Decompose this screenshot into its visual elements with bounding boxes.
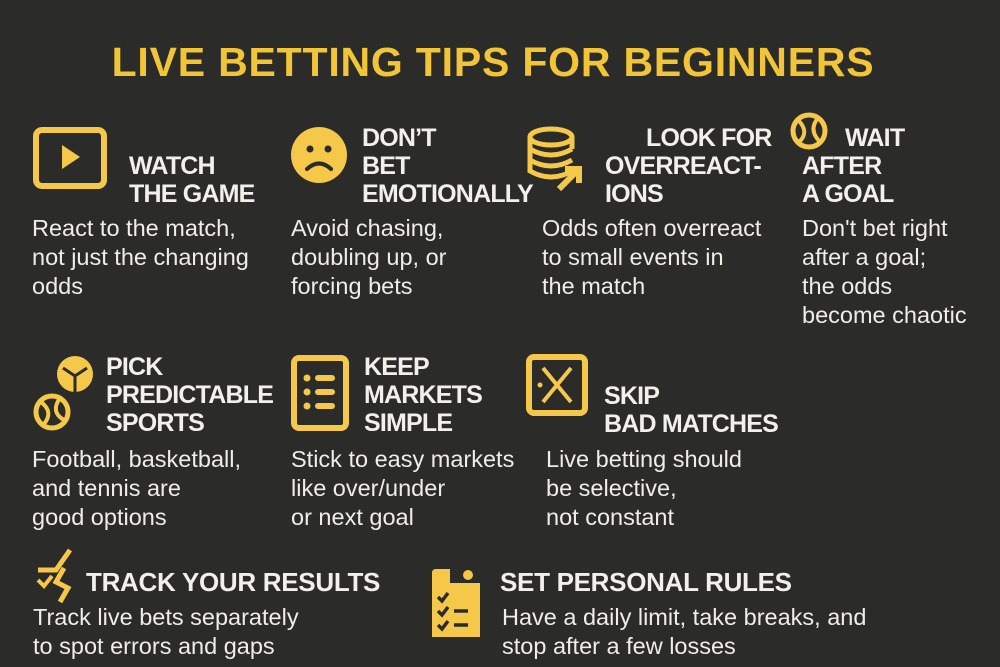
text (32, 215, 249, 299)
text: and tennis are (32, 475, 181, 501)
heading: MARKETS (364, 381, 482, 409)
text (542, 215, 762, 299)
text: not just the changing (32, 244, 249, 270)
tip: look for overreactions (528, 124, 772, 299)
text: good options (32, 504, 167, 530)
text: Odds often overreact (542, 215, 761, 241)
heading (364, 353, 482, 437)
heading: EMOTIONALLY (362, 180, 533, 208)
text (291, 446, 514, 530)
heading: WATCH (129, 152, 215, 180)
tip: keep markets simple (291, 353, 514, 530)
text: Stick to easy markets (291, 446, 514, 472)
heading: BET (362, 152, 410, 180)
heading (106, 353, 273, 437)
text: to spot errors and gaps (33, 633, 275, 659)
heading: IONS (605, 180, 663, 208)
text: doubling up, or (291, 244, 446, 270)
icon: play screen (33, 127, 107, 189)
heading (802, 124, 905, 208)
text: to small events in (542, 244, 724, 270)
tip: skip bad matches (526, 354, 778, 530)
text: Track live bets separately (33, 604, 299, 630)
heading: THE GAME (129, 180, 255, 208)
heading: SIMPLE (364, 409, 452, 437)
text: stop after a few losses (502, 633, 736, 659)
tip: don't bet emotionally (291, 124, 534, 299)
text (291, 215, 446, 299)
text (802, 215, 967, 328)
text: the match (542, 273, 645, 299)
heading: SET PERSONAL RULES (500, 567, 792, 597)
heading: TRACK YOUR RESULTS (86, 567, 380, 597)
text: Live betting should (546, 446, 742, 472)
text: become chaotic (802, 302, 967, 328)
text: forcing bets (291, 273, 412, 299)
heading: OVERREACT- (605, 152, 761, 180)
text (33, 604, 299, 659)
icon: coins with arrow (528, 126, 582, 192)
tip: wait after a goal (790, 112, 967, 328)
icon: checklist clipboard (432, 569, 480, 637)
icon: sad face (291, 127, 347, 183)
icon: checkmarks with arrow (36, 548, 72, 604)
heading: SPORTS (106, 409, 204, 437)
heading: SKIP (604, 382, 659, 410)
text: Don't bet right (802, 215, 948, 241)
text (546, 446, 742, 530)
heading: PICK (106, 353, 163, 381)
text: the odds (802, 273, 892, 299)
tip: pick predictable sports (32, 353, 273, 530)
text (32, 446, 241, 530)
tip: set personal rules (432, 567, 866, 659)
tip: track your results (33, 548, 380, 659)
text: React to the match, (32, 215, 236, 241)
icon: list document (291, 355, 349, 431)
heading: DON’T (362, 124, 436, 152)
title: LIVE BETTING TIPS FOR BEGINNERS (112, 39, 874, 85)
heading (362, 124, 534, 208)
text: Football, basketball, (32, 446, 241, 472)
heading: PREDICTABLE (106, 381, 273, 409)
heading (605, 124, 772, 208)
icon: ball (790, 112, 828, 150)
text: not constant (546, 504, 674, 530)
heading (129, 152, 255, 208)
heading: A GOAL (802, 180, 894, 208)
heading: LOOK FOR (646, 124, 772, 152)
icon: crossed box (526, 354, 588, 416)
text: odds (32, 273, 83, 299)
text: after a goal; (802, 244, 926, 270)
heading: WAIT (845, 124, 904, 152)
text: Have a daily limit, take breaks, and (502, 604, 866, 630)
heading: KEEP (364, 353, 429, 381)
text: or next goal (291, 504, 414, 530)
tip: watch the game (32, 127, 255, 299)
text (502, 604, 866, 659)
heading (604, 382, 778, 438)
text: be selective, (546, 475, 677, 501)
heading: AFTER (802, 152, 881, 180)
heading: BAD MATCHES (604, 410, 778, 438)
icon: sports balls (34, 356, 93, 430)
text: Avoid chasing, (291, 215, 443, 241)
text: like over/under (291, 475, 445, 501)
